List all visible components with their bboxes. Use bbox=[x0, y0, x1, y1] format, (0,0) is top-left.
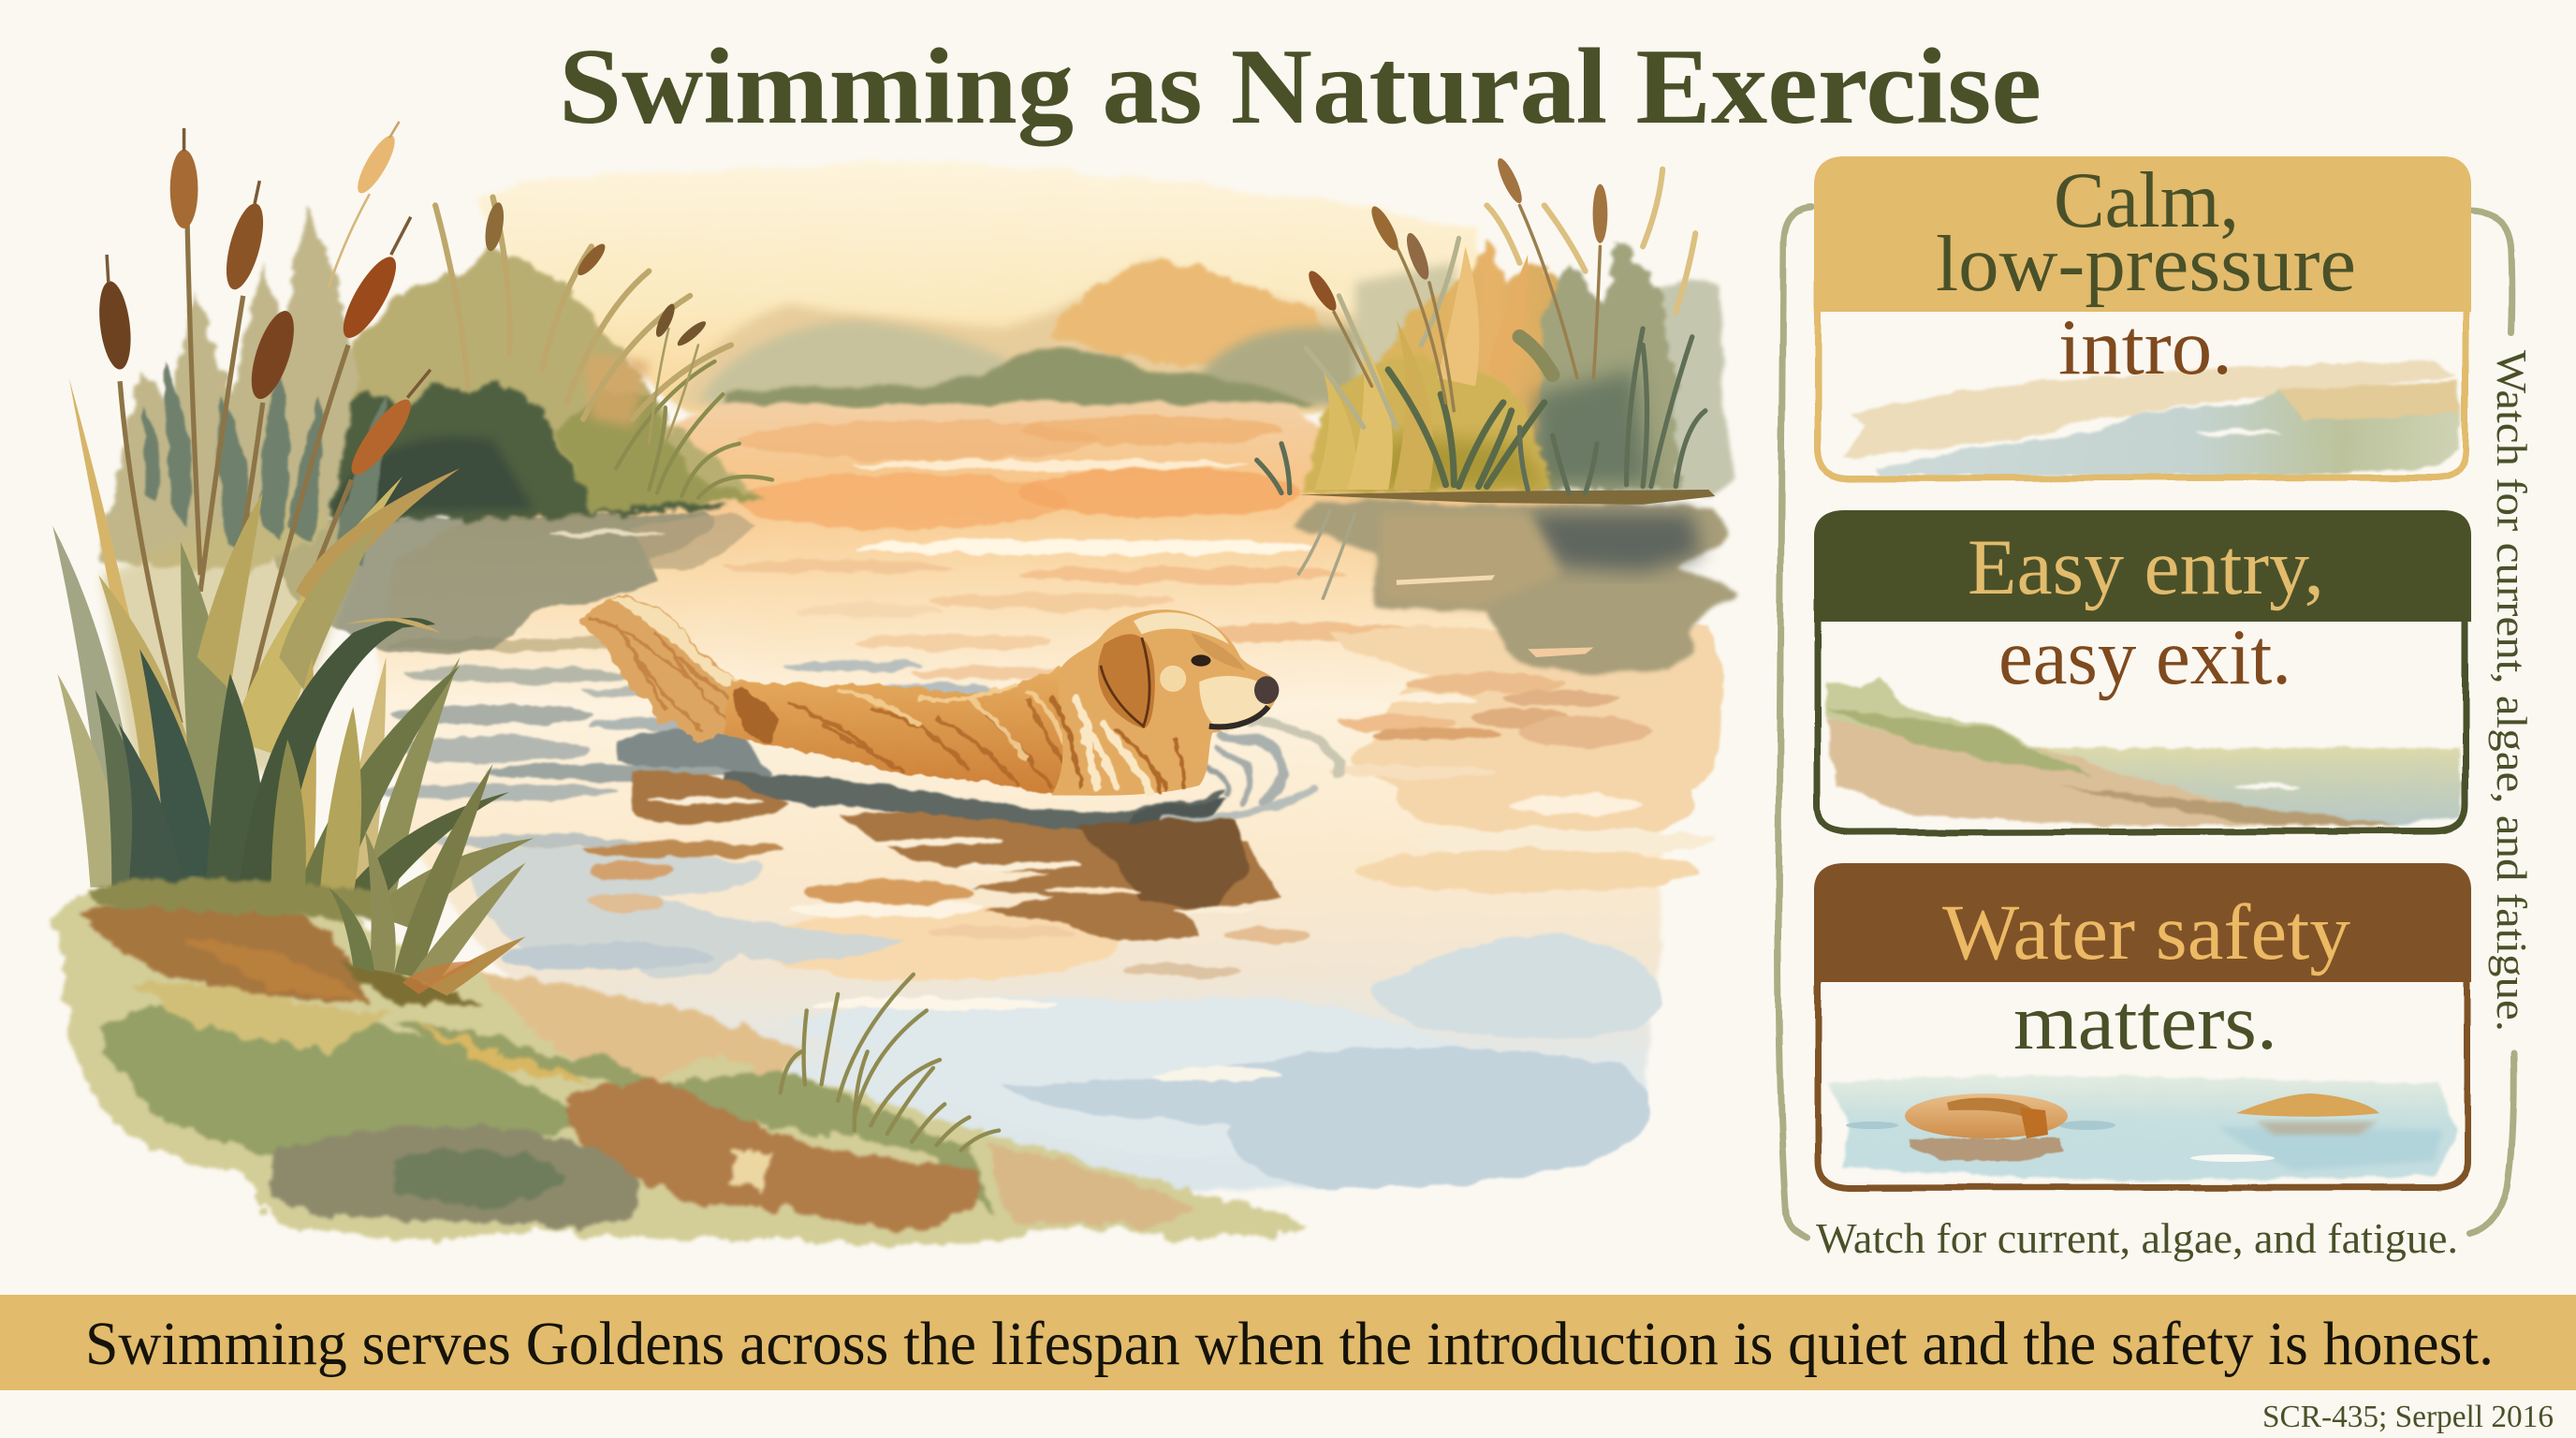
eye bbox=[1191, 654, 1211, 667]
mid-left reed bank bbox=[287, 198, 772, 520]
heading line 3: intro. bbox=[2058, 303, 2232, 391]
vertical side note: Watch for current, algae, and fatigue. bbox=[2488, 350, 2536, 1032]
bracket: watercolor frame around cards bbox=[1778, 208, 2513, 1238]
card header bbox=[1814, 156, 2471, 312]
chest fur bbox=[1051, 698, 1184, 792]
cattails bbox=[1593, 184, 1607, 243]
golden retriever bbox=[580, 596, 1279, 796]
heading: Calm, bbox=[2054, 156, 2239, 244]
mouth bbox=[1209, 707, 1268, 726]
takeaway band bbox=[0, 1295, 2576, 1390]
water: grey ripples around the dog bbox=[370, 638, 1224, 848]
water: warm reflections and cream ripples bbox=[468, 416, 1725, 1188]
card header bbox=[1814, 510, 2471, 622]
panel: easy entry, easy exit bbox=[1814, 510, 2471, 832]
water: concentric ripples by the head bbox=[1166, 723, 1340, 822]
card header bbox=[1814, 863, 2471, 982]
pond water bbox=[377, 404, 1677, 1191]
buoy bbox=[2236, 1093, 2379, 1117]
title: Swimming as Natural Exercise bbox=[559, 27, 2042, 147]
orange wash bbox=[1380, 238, 1586, 468]
heading: Water safety bbox=[1942, 888, 2351, 976]
head and chest bbox=[1051, 609, 1278, 796]
reed backdrop bbox=[98, 205, 359, 575]
right bank reflection bbox=[1298, 503, 1734, 675]
dark front blades bbox=[139, 649, 222, 896]
small foreground tuft bbox=[365, 829, 396, 973]
illustration: floating life ring and buoy bbox=[1827, 1075, 2457, 1181]
cream gaps in the reflection bbox=[868, 837, 1005, 845]
foreground bank bbox=[50, 874, 1305, 1249]
reed blades bbox=[1314, 370, 1356, 490]
heading line 2: matters. bbox=[2013, 978, 2277, 1066]
panel: calm low-pressure intro bbox=[1814, 156, 2471, 478]
left blue-grey patches bbox=[468, 847, 903, 978]
panel: water safety matters bbox=[1814, 863, 2471, 1188]
head highlights bbox=[1134, 612, 1229, 644]
card outline bbox=[1818, 281, 2466, 478]
cattail heads bbox=[170, 150, 198, 228]
shoreline grass tuft bbox=[781, 975, 999, 1151]
yellow-olive foot bbox=[1306, 359, 1553, 493]
back blades bbox=[69, 378, 165, 772]
soil at the reed base bbox=[91, 878, 394, 923]
left bank reflection bbox=[274, 513, 755, 654]
illustration: sloped bank into water bbox=[1825, 676, 2460, 826]
lower blue patch bbox=[1003, 1048, 1650, 1188]
caption: Watch for current, algae, and fatigue. bbox=[1816, 1214, 2458, 1262]
takeaway text: Swimming serves Goldens across the lifespan when the introduction is quiet and the safety is honest. bbox=[85, 1310, 2494, 1378]
dog reflection bbox=[580, 769, 1306, 976]
pale sage behind left side bbox=[1355, 263, 1462, 386]
grey-green mid leaves bbox=[142, 361, 386, 567]
upper blue patch bbox=[1372, 933, 1662, 1036]
stems bbox=[120, 194, 370, 723]
illustration: calm shoreline bbox=[1843, 362, 2460, 477]
sky wash bbox=[476, 163, 1479, 414]
lower warm patch bbox=[755, 909, 1117, 981]
card outline bbox=[1818, 599, 2466, 832]
left cattail reeds bbox=[52, 122, 999, 1151]
heading line 2: low-pressure bbox=[1936, 220, 2356, 308]
ring reflection bbox=[1910, 1138, 2064, 1161]
distant tree line bbox=[674, 259, 1429, 407]
citation: SCR-435; Serpell 2016 bbox=[2262, 1400, 2554, 1434]
illustration: golden retriever swimming in a reed-lined pond bbox=[50, 122, 1734, 1249]
waterline bbox=[1298, 490, 1715, 505]
olive and mottled dark wash bbox=[1536, 238, 1679, 490]
ear bbox=[1098, 634, 1155, 728]
right peach reflections under the island bbox=[1331, 624, 1725, 832]
small cattails bbox=[482, 201, 506, 253]
heading: Easy entry, bbox=[1968, 523, 2324, 611]
body bbox=[723, 666, 1117, 795]
nose bbox=[1254, 676, 1279, 704]
heading line 2: easy exit. bbox=[1998, 613, 2291, 701]
light blue central wash bbox=[785, 995, 1472, 1157]
right reed island bbox=[1257, 155, 1734, 505]
grey-green wash at right bbox=[1618, 279, 1734, 493]
card outline bbox=[1818, 974, 2467, 1188]
life ring bbox=[1905, 1093, 2068, 1138]
tail bbox=[580, 596, 772, 742]
